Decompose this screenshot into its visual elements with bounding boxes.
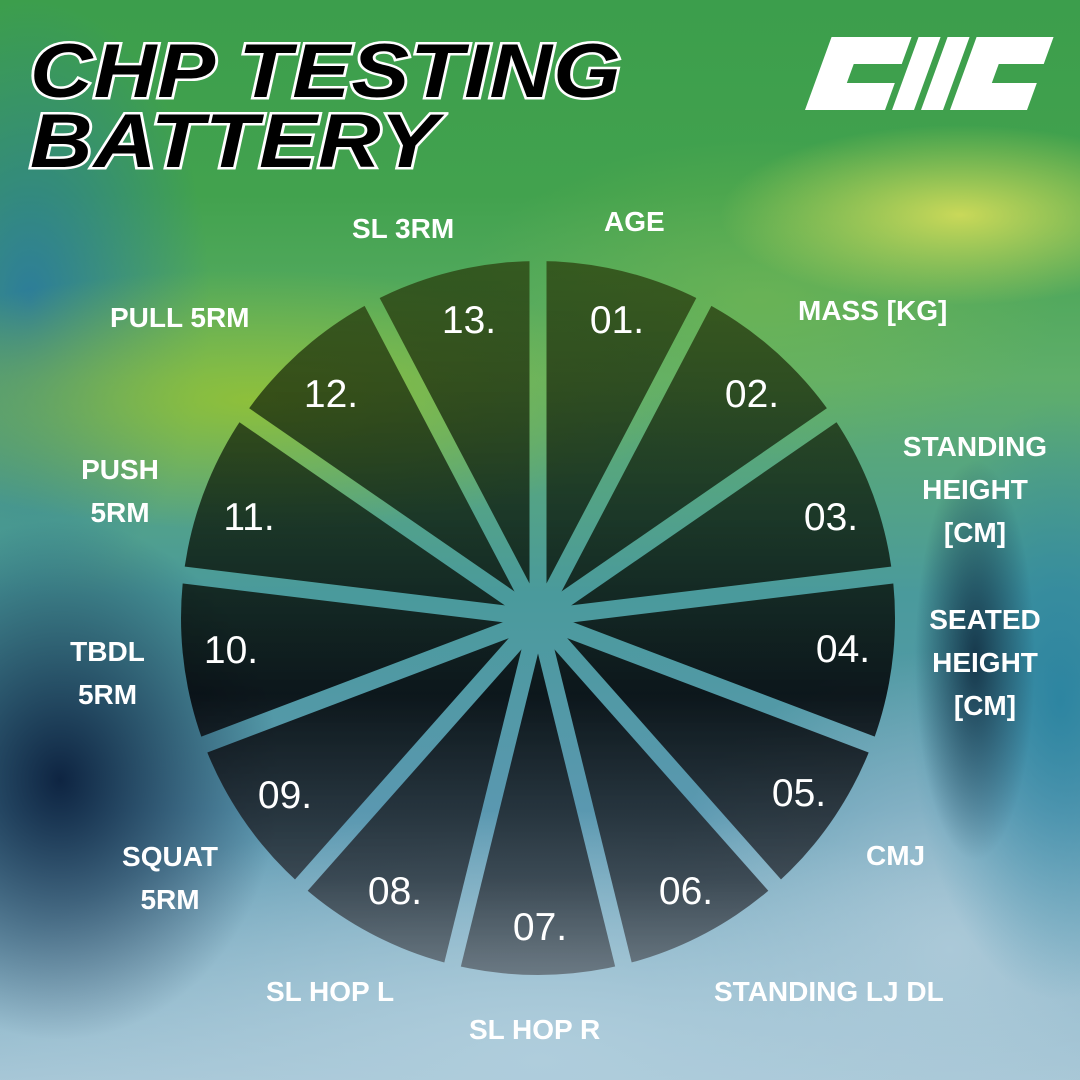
text: STANDING	[903, 431, 1047, 462]
title	[28, 29, 622, 184]
text: CMJ	[866, 840, 925, 871]
text: SEATED	[929, 604, 1041, 635]
segment numbers: 09.	[258, 774, 312, 817]
text: SL HOP R	[469, 1014, 600, 1045]
title: BATTERY	[30, 99, 439, 184]
segment numbers: 10.	[204, 629, 258, 672]
text: SQUAT	[122, 841, 218, 872]
segment numbers: 08.	[368, 870, 422, 913]
text: PUSH	[81, 454, 159, 485]
segment numbers: 07.	[513, 906, 567, 949]
segment numbers: 04.	[816, 628, 870, 671]
segment numbers: 03.	[804, 496, 858, 539]
text: SL HOP L	[266, 976, 394, 1007]
segment numbers: 06.	[659, 870, 713, 913]
segment numbers: 12.	[304, 373, 358, 416]
logo	[805, 37, 1054, 110]
segment numbers: 02.	[725, 373, 779, 416]
segment numbers: 05.	[772, 772, 826, 815]
title: CHP TESTING	[30, 29, 622, 114]
text: TBDL	[70, 636, 145, 667]
text: HEIGHT	[922, 474, 1028, 505]
text: STANDING LJ DL	[714, 976, 944, 1007]
text: SL 3RM	[352, 213, 454, 244]
segment numbers: 13.	[442, 299, 496, 342]
text: [CM]	[954, 690, 1016, 721]
text: [CM]	[944, 517, 1006, 548]
text: PULL 5RM	[110, 302, 250, 333]
text: 5RM	[78, 679, 137, 710]
text: 5RM	[140, 884, 200, 915]
segment numbers: 11.	[223, 496, 275, 539]
pie chart	[181, 261, 895, 975]
labels: AGE	[604, 206, 665, 237]
segment numbers: 01.	[590, 299, 644, 342]
text: 5RM	[90, 497, 150, 528]
segment numbers	[204, 299, 870, 949]
text: MASS [KG]	[798, 295, 947, 326]
text: HEIGHT	[932, 647, 1038, 678]
